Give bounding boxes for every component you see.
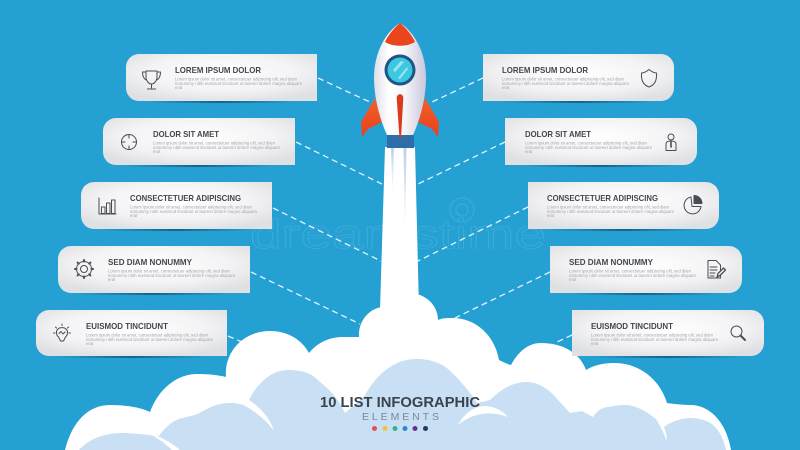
card 1 right: erat xyxy=(502,85,510,90)
card 1 left: nonummy nibh euismod tincidunt ut laoreet dolore magna aliquam xyxy=(175,81,303,86)
card 1 right: Lorem ipsum dolor sit amet, consectetuer adipiscing elit, sed diam xyxy=(502,76,624,82)
centre fin xyxy=(397,94,403,138)
card 4 right: SED DIAM NONUMMY xyxy=(569,257,653,267)
card 2 left: Lorem ipsum dolor sit amet, consectetuer adipiscing elit, sed diam xyxy=(153,140,275,146)
card 3 left: erat xyxy=(130,213,138,218)
icon: magnifier xyxy=(731,326,745,340)
rocket body xyxy=(374,23,426,135)
nose cone xyxy=(385,23,415,46)
subtitle: ELEMENTS xyxy=(362,411,439,423)
card 4 left: SED DIAM NONUMMY xyxy=(108,257,192,267)
card 2 right: erat xyxy=(525,149,533,154)
card 2 right xyxy=(505,118,697,167)
icon: person xyxy=(666,134,676,150)
card 2 left: nonummy nibh euismod tincidunt ut laoreet dolore magna aliquam xyxy=(153,145,281,150)
card 1 left xyxy=(126,54,317,103)
card 4 right: nonummy nibh euismod tincidunt ut laoreet dolore magna aliquam xyxy=(569,273,697,278)
nozzle xyxy=(387,135,414,148)
watermark: dreamstime xyxy=(250,211,546,257)
card 2 right: DOLOR SIT AMET xyxy=(525,129,592,139)
card 3 left xyxy=(81,182,272,231)
card 4 left xyxy=(58,246,250,295)
card 3 right: nonummy nibh euismod tincidunt ut laoreet dolore magna aliquam xyxy=(547,209,675,214)
card 1 left: erat xyxy=(175,85,183,90)
card 5 right: erat xyxy=(591,341,599,346)
icon: bar chart xyxy=(99,198,116,214)
card 5 left: nonummy nibh euismod tincidunt ut laoreet dolore magna aliquam xyxy=(86,337,214,342)
card 3 right xyxy=(528,182,719,231)
card 4 right: erat xyxy=(569,277,577,282)
dashed connector lines xyxy=(228,78,572,343)
card 5 right xyxy=(572,310,764,358)
rocket exhaust plume xyxy=(380,147,419,310)
card 2 left xyxy=(103,118,295,167)
card 3 left: CONSECTETUER ADIPISCING xyxy=(130,193,241,203)
icon: trophy xyxy=(142,71,160,89)
card 1 right xyxy=(483,54,674,103)
card 2 left: DOLOR SIT AMET xyxy=(153,129,220,139)
icon: pie chart xyxy=(684,196,702,214)
card 4 left: Lorem ipsum dolor sit amet, consectetuer adipiscing elit, sed diam xyxy=(108,268,230,274)
card 4 left: erat xyxy=(108,277,116,282)
white cloud xyxy=(65,293,731,450)
card 1 left: LOREM IPSUM DOLOR xyxy=(175,65,261,75)
card 2 right: Lorem ipsum dolor sit amet, consectetuer adipiscing elit, sed diam xyxy=(525,140,647,146)
icon: light bulb xyxy=(54,324,70,341)
rocket xyxy=(361,23,439,148)
card 1 left: Lorem ipsum dolor sit amet, consectetuer adipiscing elit, sed diam xyxy=(175,76,297,82)
right fin xyxy=(418,98,439,137)
card 5 left: erat xyxy=(86,341,94,346)
card 5 left: Lorem ipsum dolor sit amet, consectetuer adipiscing elit, sed diam xyxy=(86,332,208,338)
icon: document with pen xyxy=(708,260,726,278)
icon: shield xyxy=(641,70,657,87)
card 1 right: nonummy nibh euismod tincidunt ut laoreet dolore magna aliquam xyxy=(502,81,630,86)
watermark xyxy=(250,198,546,257)
card 3 left: nonummy nibh euismod tincidunt ut laoreet dolore magna aliquam xyxy=(130,209,258,214)
card 5 right: nonummy nibh euismod tincidunt ut laoreet dolore magna aliquam xyxy=(591,337,719,342)
card 3 right: erat xyxy=(547,213,555,218)
icon: gear xyxy=(75,260,93,278)
card 3 right: Lorem ipsum dolor sit amet, consectetuer adipiscing elit, sed diam xyxy=(547,204,669,210)
colour dots xyxy=(372,426,428,431)
icon: target xyxy=(122,134,136,150)
card 2 left: erat xyxy=(153,149,161,154)
title: 10 LIST INFOGRAPHIC xyxy=(320,395,481,411)
window xyxy=(384,54,416,86)
card 3 left: Lorem ipsum dolor sit amet, consectetuer adipiscing elit, sed diam xyxy=(130,204,252,210)
card 4 right: Lorem ipsum dolor sit amet, consectetuer adipiscing elit, sed diam xyxy=(569,268,691,274)
card 4 right xyxy=(550,246,742,295)
card 5 left xyxy=(36,310,227,358)
card 4 left: nonummy nibh euismod tincidunt ut laoreet dolore magna aliquam xyxy=(108,273,236,278)
left fin xyxy=(361,98,382,137)
card 3 right: CONSECTETUER ADIPISCING xyxy=(547,193,658,203)
card 5 left: EUISMOD TINCIDUNT xyxy=(86,321,169,331)
card 5 right: EUISMOD TINCIDUNT xyxy=(591,321,674,331)
card 5 right: Lorem ipsum dolor sit amet, consectetuer adipiscing elit, sed diam xyxy=(591,332,713,338)
card 1 right: LOREM IPSUM DOLOR xyxy=(502,65,588,75)
card 2 right: nonummy nibh euismod tincidunt ut laoreet dolore magna aliquam xyxy=(525,145,653,150)
light blue inner cloud xyxy=(79,359,726,450)
